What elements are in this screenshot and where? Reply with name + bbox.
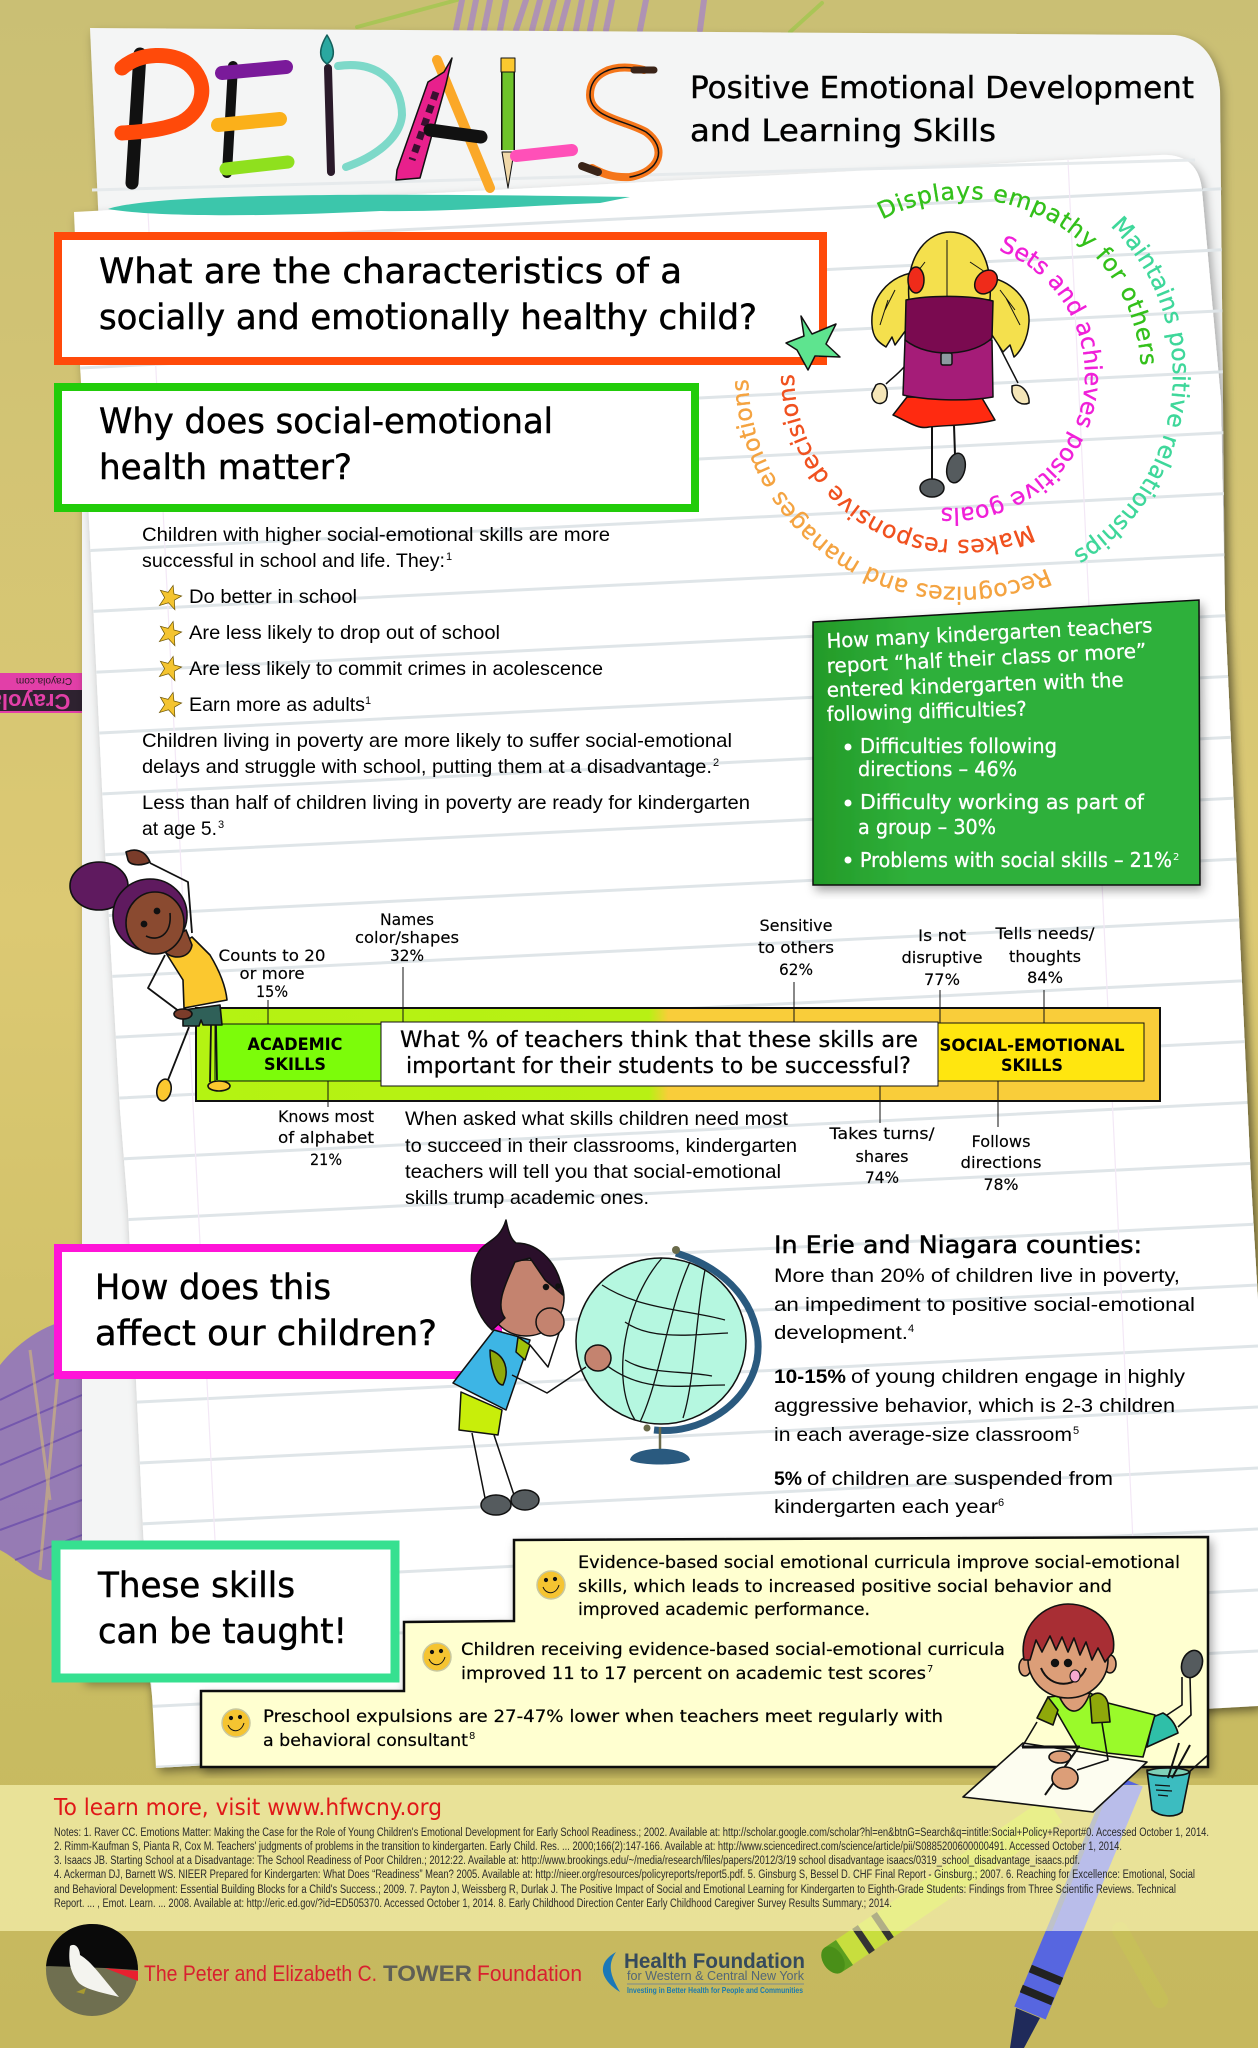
skill labels: Follows [972,1132,1030,1151]
chart question box: What % of teachers think that these skills are [400,1028,918,1053]
panel: stepped evidence callout: improved 11 to 17 percent on academic test scores [461,1664,926,1683]
social-emotional skills block: SOCIAL-EMOTIONAL [940,1036,1125,1055]
panel: kindergarten difficulties callout: report “half their class or more” [826,638,1147,678]
list: benefits with star bullets: Are less likely to commit crimes in acolescence [189,658,603,680]
skill labels: Takes turns/ [828,1124,935,1143]
panel: why it matters heading [58,387,695,508]
text block: Erie and Niagara counties: development. [774,1322,908,1344]
icon: girl with backpack [872,232,1029,497]
globe [576,1246,758,1464]
body text: why it matters: 2 [713,757,719,769]
panel: stepped evidence callout: 8 [469,1731,475,1742]
panel: why it matters heading: Why does social-emotional [99,402,553,442]
skill labels: 15% [256,982,288,1001]
skill labels [218,910,1095,1194]
panel: how does this affect our children heading [58,1248,498,1375]
logo: Tower Foundation [46,1924,582,2016]
academic skills block [215,1024,381,1081]
body text: why it matters: Children with higher social-emotional skills are more [142,524,610,546]
panel: stepped evidence callout: Children receiving evidence-based social-emotional curricula [461,1640,1005,1659]
text block: Erie and Niagara counties: of young children engage in highly [851,1366,1185,1388]
panel: stepped evidence callout: improved academic performance. [578,1600,870,1619]
panel: front notebook sheet [0,155,1258,1775]
text block: Erie and Niagara counties: 10-15% [774,1366,846,1388]
chart question box: important for their students to be successful? [406,1054,911,1079]
panel: kindergarten difficulties callout: following difficulties? [826,696,1027,726]
circular characteristic labels: Displays empathy for others [876,183,1154,364]
text block: Erie and Niagara counties: More than 20% of children live in poverty, [774,1265,1180,1287]
skill labels: 21% [310,1150,342,1169]
list: benefits with star bullets: 1 [365,695,371,707]
panel: kindergarten difficulties callout: Difficulties following [860,734,1057,758]
panel: characteristics heading: socially and emotionally healthy child? [99,298,757,338]
text block: Erie and Niagara counties: kindergarten each year [774,1496,999,1518]
logo: Tower Foundation: Foundation [477,1961,582,1986]
skill labels: Sensitive [760,916,832,935]
text block: Erie and Niagara counties: 6 [998,1497,1004,1509]
skill labels: 78% [984,1175,1018,1194]
icon: blue crayon [1010,1774,1143,2048]
panel: these skills can be taught heading: These skills [97,1566,295,1606]
skill labels: Knows most [278,1107,374,1126]
icon: green star [786,316,840,370]
panel: kindergarten difficulties callout: entered kindergarten with the [826,668,1124,702]
social-emotional skills block: SKILLS [1001,1056,1063,1075]
body text: why it matters [142,524,750,840]
skill labels: thoughts [1009,947,1081,966]
panel: kindergarten difficulties callout: a group – 30% [858,815,996,839]
skill labels: Names [380,910,434,929]
panel: kindergarten difficulties callout: Difficulty working as part of [860,790,1145,814]
body text: why it matters: Children living in poverty are more likely to suffer social-emotional [142,730,732,752]
skill labels: 62% [779,960,813,979]
panel: stepped evidence callout: skills, which leads to increased positive social behavior and [578,1577,1112,1596]
icon: smiley 2 [423,1643,451,1671]
skill labels: 32% [390,946,424,965]
circular characteristic labels: Sets and achieves positive goals [942,236,1103,526]
skill labels: disruptive [902,948,982,967]
link: learn more: To learn more, visit www.hfwcny.org [53,1795,442,1821]
panel: stepped evidence callout: Evidence-based social emotional curricula improve social-emotional [578,1553,1180,1572]
skill labels: directions [960,1153,1042,1172]
subtitle: and Learning Skills [690,114,996,149]
academic skills block: ACADEMIC [248,1035,342,1054]
circular characteristic labels: Recognizes and manages emotions [735,380,1052,605]
icon: smiley 1 [537,1571,565,1599]
text block: references: Report. ... , Emot. Learn. ... 2008. Available at: http://eric.ed.gov/?id=ED505370. Accessed October 1, 2014. 8. Early Childhood Direction Center Early Childhood Caregiver Survey Results Summary.; 2014. [54,1898,892,1910]
panel: kindergarten difficulties callout [813,600,1200,885]
skill labels: 77% [924,970,960,989]
list: benefits with star bullets: Are less likely to drop out of school [189,622,500,644]
panel: stepped evidence callout [201,1537,1208,1767]
panel: how does this affect our children heading: affect our children? [95,1314,437,1354]
text block: Erie and Niagara counties: 4 [908,1323,914,1335]
text block: Erie and Niagara counties: of children are suspended from [807,1468,1113,1490]
panel: kindergarten difficulties callout: directions – 46% [858,757,1017,781]
skill labels: to others [758,938,834,957]
icon: blue swoosh [603,1952,620,1992]
panel: stepped evidence callout: Preschool expulsions are 27-47% lower when teachers meet regularly with [263,1707,943,1726]
logo: Health Foundation: Health Foundation [624,1950,805,1973]
body text: why it matters: successful in school and life. They: [142,550,445,572]
icon: pink crayon at left edge [0,673,90,714]
subtitle [690,71,1194,149]
body text: why it matters: 3 [218,819,224,831]
icon: green crayon [816,1798,1062,1978]
text block: chart explanation: teachers will tell you that social-emotional [405,1161,781,1183]
text block: chart explanation: skills trump academic ones. [405,1187,649,1209]
icon: smiley 3 [222,1709,250,1737]
circular characteristic labels [735,183,1191,605]
body text: why it matters: Less than half of children living in poverty are ready for kindergarten [142,792,750,814]
panel: kindergarten difficulties callout: Problems with social skills – 21% [860,848,1172,872]
skill labels: Counts to 20 [218,946,326,965]
panel: these skills can be taught heading [56,1545,395,1678]
text block: Erie and Niagara counties: an impediment to positive social-emotional [774,1294,1195,1316]
list: benefits with star bullets: Do better in school [189,586,357,608]
text block: Erie and Niagara counties: aggressive behavior, which is 2-3 children [774,1395,1175,1417]
chart question box [381,1022,938,1086]
circular characteristic labels: Maintains positive relationships [1074,216,1191,562]
subtitle: Positive Emotional Development [690,71,1194,106]
list: benefits with star bullets [157,583,603,717]
panel: how does this affect our children heading: How does this [95,1268,331,1308]
panel: stepped evidence callout: 7 [927,1664,933,1675]
text block: chart explanation: When asked what skills children need most [405,1108,789,1130]
text block: Erie and Niagara counties [774,1231,1195,1518]
chart: teacher priorities bar [196,910,1160,1194]
text block: chart explanation: to succeed in their classrooms, kindergarten [405,1135,797,1157]
skill labels: of alphabet [278,1128,374,1147]
social-emotional skills block [938,1023,1144,1081]
text block: chart explanation [405,1108,797,1209]
panel: characteristics heading: What are the characteristics of a [99,252,682,292]
panel: characteristics heading [58,236,823,361]
icon: dove emblem [46,1924,138,2016]
body text: why it matters: delays and struggle with school, putting them at a disadvantage. [142,756,712,778]
icon: teal brush swoosh under logo [108,195,630,215]
academic skills block: SKILLS [264,1055,326,1074]
skill labels: Is not [918,926,966,945]
skill labels: or more [240,964,304,983]
logo: Health Foundation: Investing in Better Health for People and Communities [627,1985,803,1995]
logo: Health Foundation [603,1950,805,1995]
text block: Erie and Niagara counties: in each average-size classroom [774,1424,1072,1446]
icon: boy drawing at desk [963,1604,1208,1816]
logo: Tower Foundation: TOWER [383,1961,472,1986]
background purple crayon scribble [0,1318,82,1581]
skill labels: shares [856,1147,908,1166]
text block: Erie and Niagara counties: 5 [1073,1425,1079,1437]
panel: these skills can be taught heading: can be taught! [98,1612,347,1652]
skill labels: 74% [865,1168,899,1187]
circular characteristic labels: Makes responsive decisions [780,375,1035,554]
text block: Erie and Niagara counties: In Erie and Niagara counties: [774,1231,1142,1259]
logo: Tower Foundation: The Peter and Elizabeth C. [144,1961,377,1986]
panel: kindergarten difficulties callout: How many kindergarten teachers [826,613,1153,653]
panel: why it matters heading: health matter? [99,448,352,488]
text block: Erie and Niagara counties: 5% [774,1468,802,1490]
panel: kindergarten difficulties callout: 2 [1173,852,1179,863]
panel: back notebook sheet [82,28,1258,1760]
icon: boy looking at globe [453,1220,758,1515]
body text: why it matters: at age 5. [142,818,217,840]
skill labels: Tells needs/ [994,924,1095,943]
panel: stepped evidence callout: a behavioral consultant [263,1731,469,1750]
skill labels: 84% [1027,968,1063,987]
panel: notes band [0,1785,1258,1931]
text block: references [54,1827,1209,1910]
skill labels: color/shapes [355,928,459,947]
icon: pink crayon at left edge: Crayola.com [16,675,72,686]
list: benefits with star bullets: Earn more as adults [189,694,365,716]
body text: why it matters: 1 [446,551,452,563]
logo: Health Foundation: for Western & Central New York [627,1968,804,1983]
icon: stretching girl [70,850,230,1102]
